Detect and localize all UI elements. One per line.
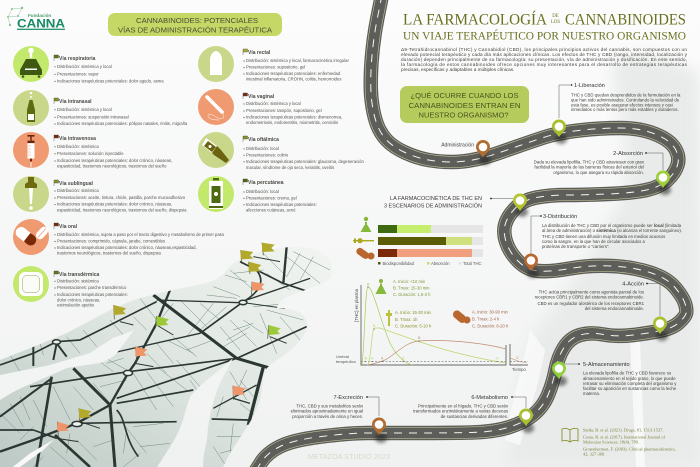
icon: dropper horizontal <box>353 238 374 243</box>
legend: respiratoria: C. Duración: 1,5-3 h <box>393 292 431 297</box>
step 3: distribución: 3-Distribución <box>543 214 577 220</box>
panel: vía intravenosa: Vía intravenosa <box>59 136 96 142</box>
legend: respiratoria <box>376 279 431 297</box>
panel: vía percutánea: Distribución: local <box>246 189 279 194</box>
heading: vías de administración: VÍAS DE ADMINISTRACIÓN TERAPÉUTICA <box>118 26 272 34</box>
line chart: THC en plasma: B <box>418 336 421 340</box>
step 7: excreción: eliminados aproximadamente en igual <box>291 408 363 414</box>
icon: suppository <box>210 51 222 75</box>
heading: farmacocinética: 3 ESCENARIOS DE ADMINISTRACIÓN <box>384 202 482 210</box>
step 2: absorción: Dada su elevada lipofilia, THC y CBD atraviesan con gran <box>534 160 645 164</box>
logo: Fundación CANNA: CANNA <box>17 16 65 30</box>
heading: vías de administración <box>108 13 282 36</box>
icon: eye drops <box>202 138 230 166</box>
step: administración: Administración <box>441 142 474 148</box>
step 5: almacenamiento: La elevada lipofilia de THC y CBD favorece su <box>583 370 672 376</box>
panel: vía percutánea: Indicaciones terapéuticas potenciales: <box>246 202 317 207</box>
panel: vía oftálmica: Vía oftálmica <box>248 137 279 143</box>
callout: question: NUESTRO ORGANISMO? <box>418 110 508 120</box>
line chart: THC en plasma: B <box>373 324 376 328</box>
bar: respiratoria <box>378 225 483 233</box>
panel: vía sublingual <box>13 176 187 212</box>
panel: vía vaginal <box>198 89 342 125</box>
panel: vía vaginal: Distribución: sistémica y local <box>246 101 301 106</box>
legend: sublingual <box>386 310 432 328</box>
step 3: distribución: como la sangre, en la que han de circular asociados a <box>542 239 646 244</box>
step 3: distribución: La distribución de THC y CBD por el organismo puede ser local (limitada <box>542 223 682 228</box>
panel: vía percutánea: afecciones cutáneas, acné <box>246 208 296 212</box>
credit: Metazoa Studio: METAZOA STUDIO 2023 <box>308 454 390 461</box>
panel: vía oftálmica: macular, síndrome de ojo seco, keratitis, uveítis <box>246 165 334 170</box>
icon: tampon <box>207 97 224 120</box>
legend: sublingual: B. Tmax: 1h <box>395 317 418 322</box>
panel: vía oftálmica: Presentaciones: colirio <box>246 152 289 158</box>
line chart: THC en plasma: terapéutico <box>336 359 357 364</box>
step 7: excreción: proporción a través de orina y heces. <box>292 414 363 419</box>
step 2: absorción: organismo, lo que asegura su rápida absorción. <box>553 170 644 175</box>
bar chart: biodisponibilidad <box>353 217 483 266</box>
line chart: THC en plasma: C <box>516 356 519 360</box>
step 5: almacenamiento <box>552 362 677 396</box>
panel: vía rectal: Presentaciones: supositorio, gel <box>246 65 305 70</box>
panel: vía transdérmica: Presentaciones: parche transdérmico <box>57 285 127 290</box>
step 1: liberación: THC y CBD quedan desprendidos de la formulación en la <box>571 92 681 98</box>
line chart: THC en plasma: A <box>381 356 384 360</box>
step 3: distribución <box>524 214 682 271</box>
step 2: absorción: 2-Absorción <box>613 151 643 157</box>
references: Stella, B. et al. (2021). Drugs, 81, 1513-1537. <box>583 428 664 434</box>
step 4: acción: 4-Acción <box>622 282 644 288</box>
step: administración <box>441 140 490 158</box>
icon: nasal spray <box>27 92 35 122</box>
panel: vía sublingual: espasticidad, trastornos neurológicos, trastornos del sueño, dispepsia <box>57 208 187 212</box>
heading: farmacocinética: LA FARMACOCINÉTICA DE THC EN <box>390 195 482 202</box>
panel: vía intranasal: Distribución: sistémica y local <box>57 107 112 112</box>
body map illustration <box>0 243 333 467</box>
legend: Biodisponibilidad <box>382 261 415 266</box>
legend: sublingual: C. Duración: 5-10 h <box>395 324 432 328</box>
curve: sublingual <box>368 328 506 365</box>
step 6: metabolismo <box>413 395 533 426</box>
icon: pills <box>13 225 38 248</box>
step 5: almacenamiento: materna. <box>583 391 600 396</box>
panel: vía oftálmica: Distribución: local <box>246 146 279 151</box>
step 7: excreción: 7-Excreción <box>333 395 363 401</box>
legend: oral: A. Inicio: 30-90 min <box>472 310 509 314</box>
panel: vía vaginal: endometriosis, endometritis, miometritis, cervicitis <box>246 120 338 125</box>
legend: Total THC <box>463 261 482 266</box>
title: DE <box>552 14 559 19</box>
panel: vía oral: trastornos neurológicos, trastornos del sueño, dispepsia <box>57 250 161 256</box>
references: Molecular Sciences, 18(4), 789. <box>583 440 639 446</box>
icon: patch <box>19 272 43 296</box>
curve: oral <box>367 340 506 365</box>
intro paragraph: la farmacología de estos cannabinoides ofrece opciones muy interesantes para el desarrollo de estrategias terapéuticas <box>401 62 688 67</box>
legend: oral: C. Duración: 6-20 h <box>472 324 509 328</box>
step 5: almacenamiento: 5-Almacenamiento <box>583 362 630 368</box>
step 3: distribución: al área de administración) o sistémica (si alcanza el torrente sanguíneo). <box>542 228 682 233</box>
line chart: THC en plasma: A <box>364 356 368 360</box>
title: LOS <box>551 20 560 25</box>
road <box>255 0 686 467</box>
panel: vía sublingual: Vía sublingual <box>59 181 94 187</box>
step 7: excreción <box>291 395 386 435</box>
step 4: acción: del sistema endocannabinoide. <box>585 306 644 311</box>
panel: vía transdérmica <box>13 266 128 308</box>
panel: vía sublingual: Presentaciones: aceite, tintura, chicle, pastilla, parche mucoadhesivo <box>57 195 186 200</box>
panel: vía respiratoria: Vía respiratoria <box>59 56 96 62</box>
step 5: almacenamiento: retrasar su eliminación completa del organismo y <box>583 381 677 386</box>
step 1: liberación <box>552 83 681 137</box>
intro paragraph <box>401 47 688 72</box>
panel: vía intravenosa <box>13 132 172 168</box>
line chart: THC en plasma: Umbral <box>336 354 349 359</box>
panel: vía oral <box>13 219 225 256</box>
panel: vía rectal: Indicaciones terapéuticas potenciales: enfermedad <box>246 71 341 76</box>
step 6: metabolismo: transformados enzimáticamente a varias decenas <box>413 408 508 414</box>
legend: Absorción <box>431 261 450 266</box>
step 4: acción: THC actúa principalmente como agonista parcial de los <box>539 290 644 294</box>
step 7: excreción: THC, CBD y sus metabolitos serán <box>296 404 364 408</box>
bar: oral <box>378 249 483 257</box>
panel: vía intranasal: Presentaciones: suspensión intranasal <box>57 114 129 120</box>
step 5: almacenamiento: facilitar su aparición en sustancias como la leche <box>583 386 677 391</box>
panel: vía respiratoria: Distribución: sistémica y local <box>57 64 112 69</box>
references: 42, 327-360. <box>583 452 605 458</box>
line chart: THC en plasma: C <box>402 356 405 360</box>
panel: vía transdérmica: Distribución: sistémica <box>57 278 99 284</box>
step 1: liberación: esta fase, es posible asegurar efectos intensos y casi <box>571 102 673 108</box>
step 3: distribución: THC y CBD tienen una difusión muy limitada en medios acuosos <box>542 234 665 239</box>
panel: vía percutánea <box>198 176 317 212</box>
icon: brown pills <box>355 247 374 260</box>
heading: vías de administración: CANNABINOIDES: POTENCIALES <box>136 18 258 25</box>
panel: vía respiratoria <box>13 46 164 84</box>
callout: question: CANNABINOIDES ENTRAN EN <box>408 101 520 110</box>
panel: vía oral: Indicaciones terapéuticas potenciales: dolor crónico, náuseas,espasticidad, <box>57 245 197 250</box>
background silhouette <box>505 56 700 467</box>
panel: vía rectal <box>198 46 349 82</box>
legend <box>378 261 482 266</box>
panel: vía oral: Presentaciones: comprimido, cápsula, jarabe, comestibles <box>57 239 165 244</box>
panel: vía intranasal: Indicaciones terapéuticas potenciales: pólipos nasales, rinitis, migraña <box>57 121 188 126</box>
step 5: almacenamiento: almacenamiento en el tejido graso, lo que puede <box>583 376 676 381</box>
step 2: absorción: facilidad la mayoría de las barreras físicas del exterior del <box>534 164 644 170</box>
icon: syringe <box>28 135 34 168</box>
icon: vaporizer <box>20 48 42 78</box>
line chart: THC en plasma: B <box>367 282 370 286</box>
panel: vía intravenosa: Indicaciones terapéuticas potenciales: dolor crónico, náuseas, <box>57 158 172 163</box>
line chart: THC en plasma: A <box>371 356 374 360</box>
references <box>583 428 676 458</box>
curve: respiratoria <box>362 287 412 365</box>
line chart: THC en plasma: Tiempo <box>512 367 526 372</box>
panel: vía intravenosa: Distribución: sistémica <box>57 144 99 149</box>
intro paragraph: elevado potencial terapéutico y cada día más aplicaciones clínicas. Los efectos de THC y CBD (rango, intensidad, localización y <box>401 52 688 57</box>
icon: flask <box>360 217 372 232</box>
panel: vía percutánea: Presentaciones: crema, gel <box>246 196 297 200</box>
intro paragraph: Δ9-Tetrahidrocannabinol (THC) y Cannabidiol (CBD), los principales principios activos del cannabis, son compuestos con un <box>401 47 687 52</box>
step 1: liberación: inmediatos o más lentos pero más estables y duraderos. <box>571 107 679 112</box>
logo: Fundación CANNA <box>7 7 65 31</box>
line chart: THC en plasma: C <box>496 356 499 360</box>
panel: vía transdérmica: estimulación apetito <box>57 302 95 308</box>
panel: vía transdérmica: Vía transdérmica <box>59 272 100 278</box>
icon: dropper <box>25 177 37 210</box>
step 6: metabolismo: Principalmente en el hígado, THC y CBD serán <box>418 404 509 408</box>
step 2: absorción <box>534 151 670 188</box>
bar: sublingual <box>378 237 483 245</box>
legend: respiratoria: B. Tmax: 15-30 min <box>393 286 430 290</box>
step 6: metabolismo: 6-Metabolismo <box>471 395 508 401</box>
legend: respiratoria: A. Inicio: <10 min <box>393 279 426 284</box>
panel: vía intravenosa: espasticidad, trastornos neurológicos, trastornos del sueño <box>57 164 167 168</box>
panel: vía oral: Distribución: sistémica, sujeta a paso por el tracto digestivo y metabolismo de primer paso <box>57 232 225 237</box>
line chart: THC en plasma: [THC] en plasma <box>354 289 359 322</box>
logo: Fundación CANNA: Fundación <box>28 13 51 18</box>
pin shadows <box>375 134 671 443</box>
panel: vía intravenosa: Presentaciones: solución inyectable <box>57 151 124 156</box>
legend: oral: B. Tmax: 2-4 h <box>472 316 500 322</box>
panel: vía oftálmica: Indicaciones terapéuticas potenciales: glaucoma, degeneración <box>246 159 364 164</box>
title: CANNABINOIDES <box>565 12 686 28</box>
panel: vía respiratoria: Indicaciones terapéuticas potenciales: dolor agudo, asma <box>57 78 164 84</box>
panel: vía vaginal: Presentaciones: tampón, supositorio, gel <box>246 108 322 113</box>
panel: vía rectal: Distribución: sistémica y local, farmacocinética irregular <box>246 58 349 63</box>
title: LA FARMACOLOGÍA <box>403 12 548 28</box>
step 4: acción: CBD es un regulador alostérico de los receptores CBR1 <box>537 301 645 306</box>
map flags <box>57 243 281 437</box>
step 1: liberación: 1-Liberación <box>574 83 605 89</box>
panel: vía oral: Vía oral <box>59 224 78 230</box>
step 4: acción <box>535 282 667 334</box>
panel: vía sublingual: Distribución: sistémica <box>57 188 99 193</box>
panel: vía rectal: intestinal inflamatoria, CROHN, colitis, hemorroides <box>246 76 341 82</box>
step 6: metabolismo: de sustancias derivadas diferentes. <box>441 414 508 419</box>
panel: vía transdérmica: Indicaciones terapéuticas potenciales: <box>57 292 128 297</box>
callout: question: ¿QUÉ OCURRE CUANDO LOS <box>410 91 518 100</box>
intro paragraph: duración) dependen principalmente de su farmacología: su presentación, vía de administración y dosificación. En este sentido, <box>401 57 687 62</box>
step 4: acción: receptores CBR1 y CBR2 del sistema endocannabinoide. <box>535 294 644 300</box>
panel: vía rectal: Vía rectal <box>248 50 271 56</box>
panel: vía vaginal: Vía vaginal <box>248 94 275 100</box>
step 3: distribución: proteínas de transporte o “carriers”. <box>542 244 610 249</box>
icon: book <box>562 428 578 442</box>
references: Costa, R. et al. (2017). International Journal of <box>583 434 666 440</box>
title <box>403 12 686 42</box>
icon: cream tube <box>209 178 223 209</box>
heading: farmacocinética <box>384 194 527 211</box>
panel: vía transdérmica: dolor crónico, náuseas, <box>57 298 100 302</box>
panel: vía intranasal: Vía intranasal <box>59 99 92 105</box>
references: Grotenhermen, F. (2003). Clinical pharmacokinetics, <box>583 446 676 452</box>
intro paragraph: precisas, específicas y adaptables a múltiples clínicas. <box>401 67 514 72</box>
legend: oral <box>451 309 509 328</box>
title: UN VIAJE TERAPÉUTICO POR NUESTRO ORGANISMO <box>403 28 686 42</box>
step 1: liberación: que han sido administrados. Controlando la velocidad de <box>571 98 680 102</box>
panel: vía sublingual: Indicaciones terapéuticas potenciales: dolor crónico, náuseas, <box>57 202 172 207</box>
callout: question <box>400 86 529 123</box>
panel: vía intranasal <box>13 90 188 126</box>
panel: vía vaginal: Indicaciones terapéuticas potenciales: dismenorrea, <box>246 115 342 120</box>
panel: vía oftálmica <box>198 132 364 170</box>
line chart: THC en plasma <box>336 279 528 372</box>
panel: vía respiratoria: Presentaciones: vapor <box>57 72 99 76</box>
panel: vía percutánea: Vía percutánea <box>248 180 284 186</box>
legend: sublingual: A. Inicio: 15-30 min <box>395 310 432 315</box>
